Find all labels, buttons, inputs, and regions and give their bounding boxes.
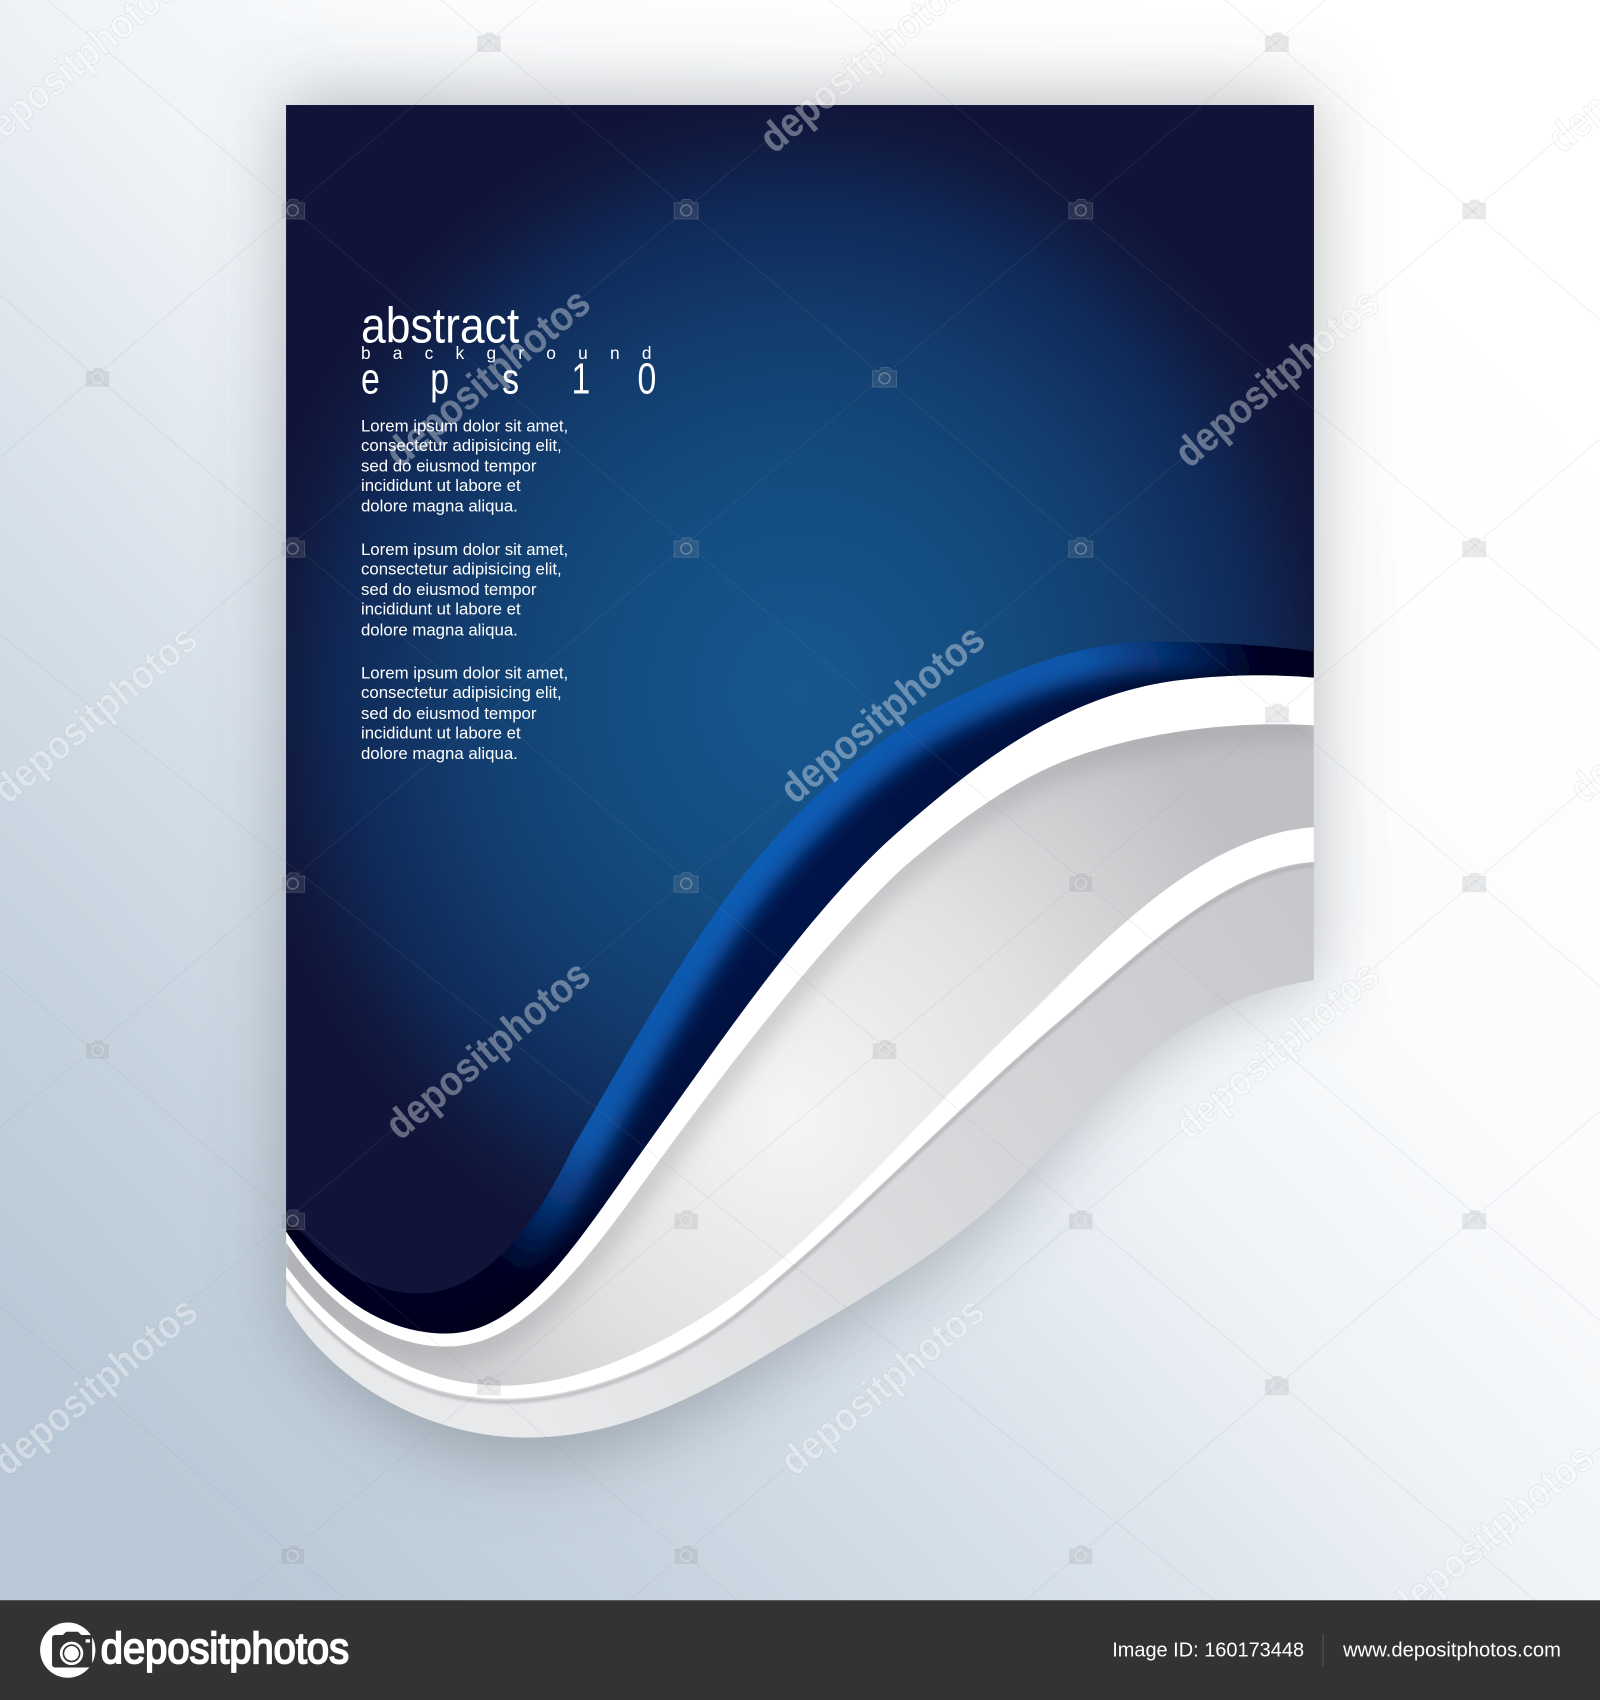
- watermark wordmarks: depositphotos: [1166, 951, 1388, 1148]
- text block 1: incididunt ut labore et: [361, 476, 521, 495]
- sheet drop shadow: [286, 98, 1314, 1459]
- heading: abstract background eps 10: background: [361, 343, 651, 363]
- text block 2: consectetur adipisicing elit,: [361, 560, 562, 579]
- watermark wordmarks: depositphotos: [771, 615, 993, 812]
- icon: depositphotos camera logo: [40, 1622, 95, 1678]
- text block 1: sed do eiusmod tempor: [361, 457, 537, 476]
- footer bar: [0, 1600, 1600, 1700]
- text block 2: [361, 540, 568, 639]
- heading: abstract background eps 10: abstract: [361, 298, 519, 354]
- watermark wordmarks: depositphotos: [771, 1287, 993, 1484]
- panel: curved sheet: [286, 105, 1314, 1438]
- text block 2: dolore magna aliqua.: [361, 620, 518, 639]
- logo wordmark: depositphotos: [101, 1625, 349, 1673]
- text block 3: sed do eiusmod tempor: [361, 704, 537, 723]
- image id: Image ID: 160173448: [1112, 1640, 1304, 1662]
- watermark camera icons: [86, 33, 1486, 1564]
- heading: abstract background eps 10: [361, 298, 656, 404]
- text block 3: incididunt ut labore et: [361, 723, 521, 742]
- text block 3: Lorem ipsum dolor sit amet,: [361, 664, 568, 683]
- text block 1: dolore magna aliqua.: [361, 497, 518, 516]
- watermark wordmarks: depositphotos: [376, 279, 599, 476]
- watermark wordmarks: depositphotos: [1166, 279, 1388, 476]
- shadow under first white band: [286, 727, 1314, 1350]
- navy main area: [286, 105, 1314, 1293]
- watermark wordmarks: depositphotos: [376, 951, 599, 1148]
- text block 2: sed do eiusmod tempor: [361, 580, 537, 599]
- website url: www.depositphotos.com: [1342, 1640, 1561, 1662]
- bright blue glow in band: [307, 642, 1314, 1293]
- lower gray layer: [286, 105, 1314, 1438]
- shadow under second white band: [286, 865, 1314, 1402]
- text block 3: dolore magna aliqua.: [361, 744, 518, 763]
- text block 2: Lorem ipsum dolor sit amet,: [361, 540, 568, 559]
- text block 1: [361, 417, 568, 516]
- first white band: [286, 105, 1314, 1347]
- text block 3: consectetur adipisicing elit,: [361, 683, 562, 702]
- text block 2: incididunt ut labore et: [361, 600, 521, 619]
- second white band: [286, 105, 1314, 1399]
- middle gray layer: [286, 105, 1314, 1386]
- text block 1: consectetur adipisicing elit,: [361, 436, 562, 455]
- dark blue band: [286, 105, 1314, 1334]
- heading: abstract background eps 10: eps10: [361, 356, 656, 404]
- text block 3: [361, 664, 568, 763]
- text block 1: Lorem ipsum dolor sit amet,: [361, 417, 568, 436]
